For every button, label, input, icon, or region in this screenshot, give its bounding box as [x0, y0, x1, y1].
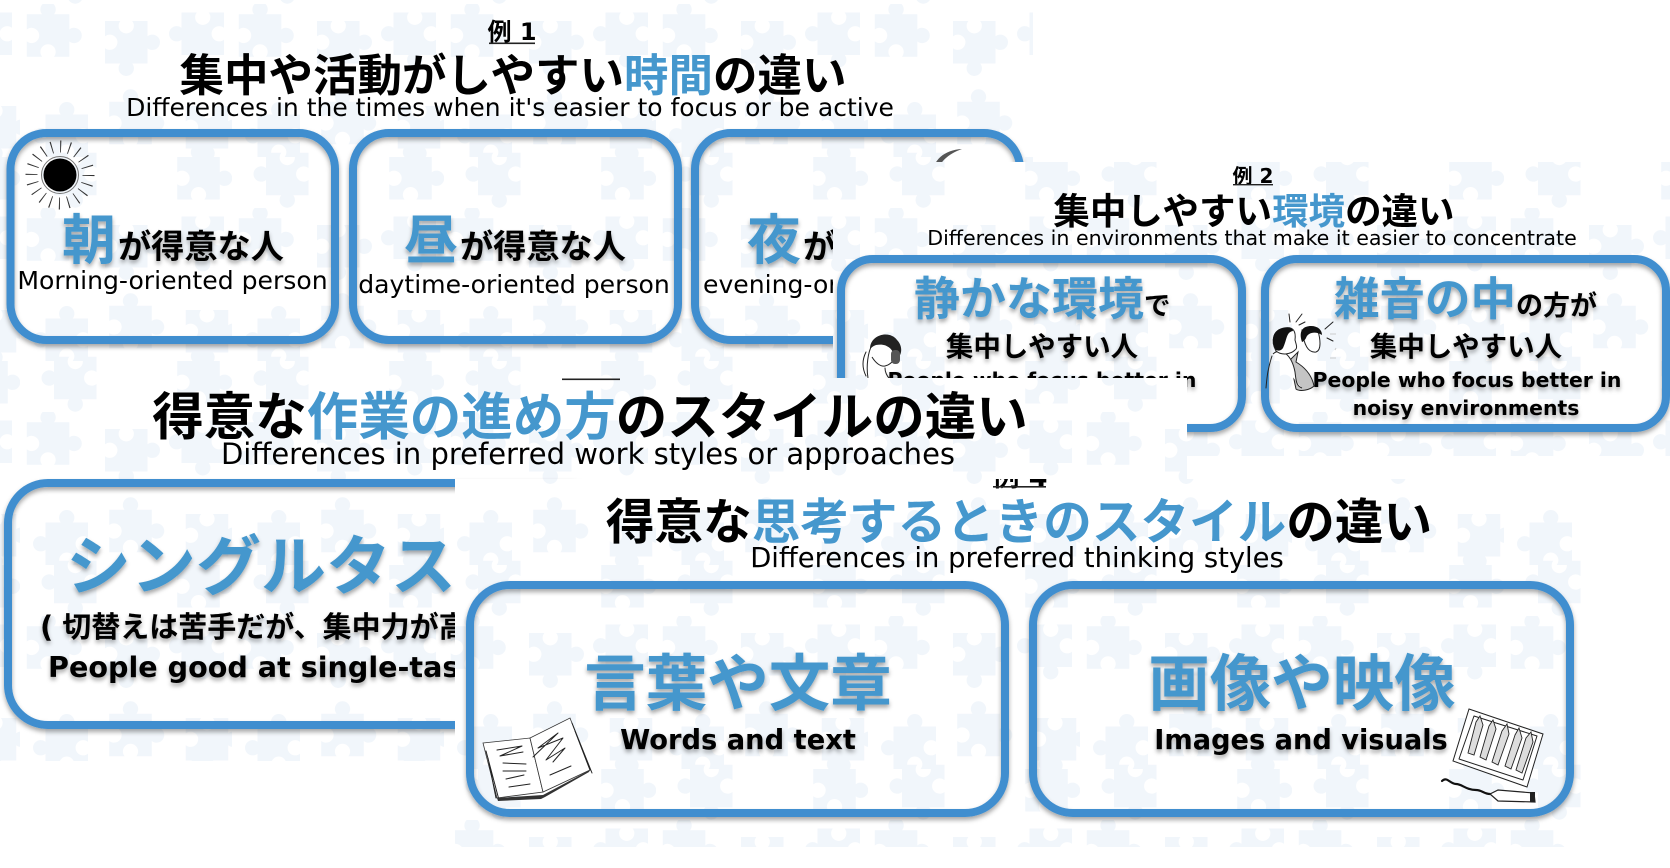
- heading: environment differences: 集中しやすい環境の違い: [1053, 190, 1455, 233]
- label: example 1: 例 1: [487, 18, 537, 46]
- icon: sun: [32, 146, 88, 204]
- daytime person text: 昼: [404, 209, 458, 272]
- images and visuals heading: 画像や映像: [1148, 648, 1456, 720]
- card: evening person: [695, 133, 1020, 340]
- subheading: thinking style differences: Differences in preferred thinking styles: [750, 543, 1284, 574]
- subheading: work style differences: Differences in preferred work styles or approaches: [221, 437, 955, 471]
- heading: time differences: 集中や活動がしやすい時間の違い: [179, 51, 847, 102]
- quiet environment subtext: 集中しやすい人: [946, 331, 1139, 363]
- quiet environment text: 静かな環境で: [914, 272, 1170, 326]
- noisy environment english line 2: noisy environments: [1353, 396, 1579, 420]
- panel: example 1, times of day: [0, 0, 1033, 378]
- noisy environment subtext: 集中しやすい人: [1370, 331, 1563, 363]
- panel: example 2, environments: [833, 162, 1670, 456]
- noisy environment english: People who focus better in: [1313, 368, 1621, 392]
- morning person text: が得意な人: [118, 227, 284, 266]
- icon: crayons and marker: [1442, 709, 1543, 802]
- panel: example 4, thinking styles: [455, 462, 1580, 847]
- heading: work style differences: 得意な作業の進め方のスタイルの違い: [152, 388, 1028, 448]
- noisy environment text: 雑音の中の方が: [1334, 273, 1597, 326]
- card: morning person: [10, 133, 335, 340]
- icon: person with headphones: [863, 334, 901, 378]
- morning person english: Morning-oriented person: [17, 266, 328, 295]
- evening person text: が得意な人: [803, 227, 969, 266]
- evening person text: 夜: [747, 209, 801, 272]
- morning person text: 朝: [62, 209, 116, 272]
- evening person english: evening-oriented person: [703, 270, 1012, 299]
- single-task heading: シングルタスク: [66, 530, 521, 605]
- card: single-tasker: [8, 483, 608, 725]
- words and text heading: 言葉や文章: [584, 648, 892, 720]
- label: example 4: 例 4: [992, 462, 1048, 493]
- label: example 3 underline: [562, 378, 620, 380]
- card: daytime person: [353, 133, 678, 340]
- images and visuals english: Images and visuals: [1154, 725, 1448, 756]
- subheading: environment differences: Differences in environments that make it easier to concentrate: [927, 226, 1577, 250]
- card: words and text: [470, 585, 1005, 813]
- icon: crescent moon: [932, 149, 962, 175]
- subheading: time differences: Differences in the times when it's easier to focus or be active: [126, 93, 894, 122]
- quiet environment english: People who focus better in: [888, 368, 1196, 392]
- icon: open book: [483, 718, 592, 801]
- heading: thinking style differences: 得意な思考するときのスタイルの違い: [606, 495, 1432, 551]
- panel: example 3, work styles: [0, 378, 1187, 761]
- words and text english: Words and text: [620, 725, 856, 756]
- card: noisy environment: [1265, 259, 1666, 428]
- card: images and visuals: [1033, 585, 1570, 813]
- icon: two people talking: [1266, 314, 1336, 390]
- single-task note: ( 切替えは苦手だが、集中力が高い: [40, 610, 497, 644]
- card: quiet environment: [841, 259, 1242, 428]
- single-task english: People good at single-tasking: [48, 650, 529, 684]
- daytime person text: が得意な人: [460, 227, 626, 266]
- daytime person english: daytime-oriented person: [358, 270, 670, 299]
- label: example 2: 例 2: [1233, 164, 1273, 188]
